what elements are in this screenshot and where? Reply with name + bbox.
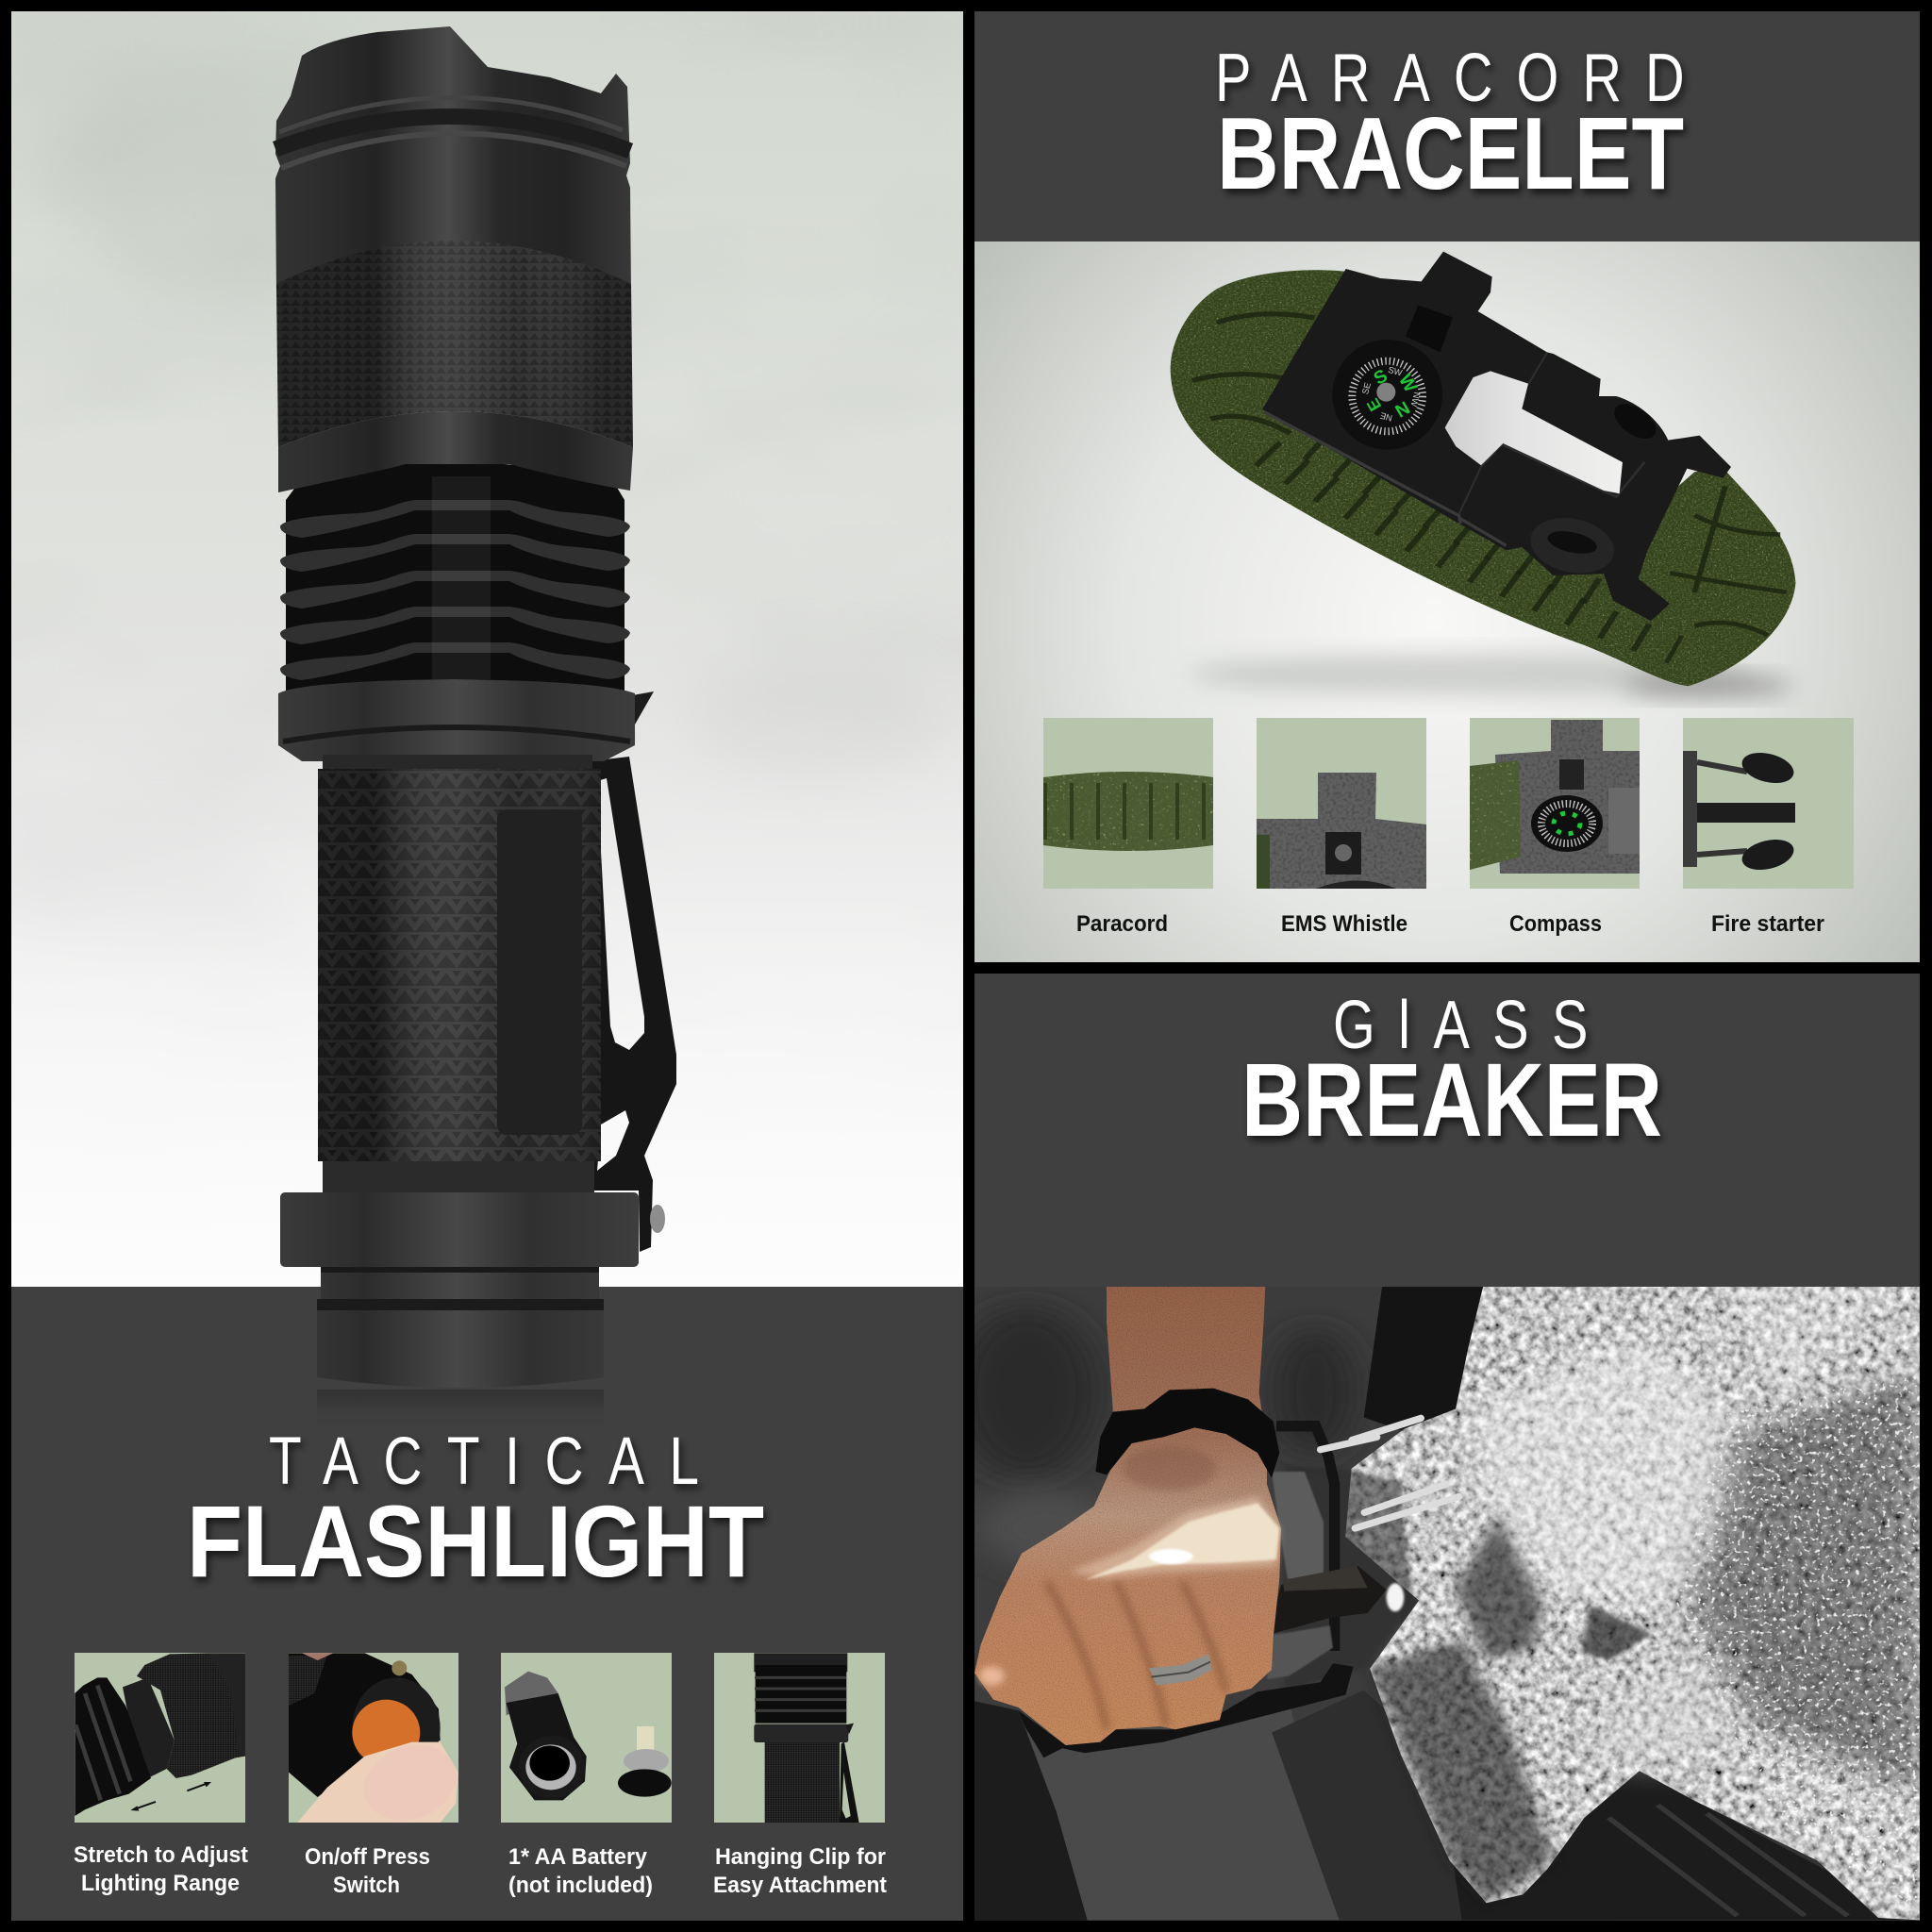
fin sheen strip — [432, 476, 491, 679]
hole in the glass — [1456, 1515, 1541, 1660]
ring groove — [1151, 1662, 1210, 1677]
lower debris shade — [1370, 1639, 1554, 1903]
bright core — [1149, 1549, 1193, 1564]
cooling fins — [280, 500, 630, 680]
caption — [74, 1842, 248, 1896]
caption: 1* AA Battery — [508, 1844, 648, 1870]
knurled zoom ring — [276, 241, 633, 447]
thumbnail: EMS whistle — [1257, 718, 1426, 937]
lower ring — [280, 1192, 639, 1267]
tool lower shards — [1267, 1625, 1333, 1679]
upper collar ring — [278, 679, 635, 761]
label: Compass — [1509, 911, 1602, 937]
ground — [1026, 1707, 1345, 1920]
wrist shadow — [1123, 1446, 1217, 1491]
scene: car window — [954, 1286, 1920, 1920]
whistle hole — [1406, 305, 1453, 352]
caption: Hanging Clip for — [715, 1844, 886, 1870]
head highlight ring upper — [279, 97, 623, 132]
buckle body — [1262, 252, 1731, 621]
caption — [305, 1844, 430, 1898]
top glare — [1725, 1290, 1890, 1400]
tool handle — [1019, 1663, 1354, 1757]
head collar — [278, 411, 633, 492]
panel: bracelet photo — [974, 242, 1920, 962]
striker top — [1283, 1566, 1368, 1591]
weave shadows second row — [1296, 438, 1621, 602]
tail neck — [321, 1267, 599, 1303]
title: TACTICAL FLASHLIGHT: TACTICAL — [269, 1424, 699, 1498]
compass: N — [1391, 396, 1412, 421]
flashlight — [274, 26, 676, 1435]
feature: on/off press switch — [289, 1653, 467, 1898]
left knot shadows — [1192, 314, 1315, 433]
bracelet floor shadow — [1189, 654, 1792, 698]
label: Fire starter — [1711, 911, 1824, 937]
dark window pillar — [1364, 1286, 1483, 1430]
sunlit patch — [1085, 1503, 1279, 1580]
shattered glass — [1284, 1286, 1920, 1920]
collar groove — [283, 727, 630, 741]
finger creases — [1047, 1582, 1226, 1729]
title: PARACORD BRACELET: BRACELET — [1217, 96, 1684, 211]
bright streak — [1584, 1647, 1738, 1775]
tool striker — [1272, 1566, 1387, 1634]
thumb tip — [979, 1667, 1005, 1686]
hand with breaker tool — [974, 1286, 1458, 1922]
speckle droplets — [1676, 1371, 1920, 1916]
label: Paracord — [1076, 911, 1168, 937]
pants — [974, 1701, 1088, 1922]
bracelet — [1171, 252, 1795, 686]
dark lower panel — [11, 1287, 963, 1921]
right knot shadows — [1670, 487, 1787, 636]
buckle lower edge highlight — [1264, 412, 1507, 545]
compass: W — [1394, 371, 1421, 396]
hand — [974, 1286, 1281, 1745]
sunlit glow — [1069, 1497, 1279, 1578]
paracord band — [1171, 270, 1795, 686]
fin core — [286, 462, 625, 693]
panel: paracord bracelet header — [974, 11, 1920, 242]
slot rim — [1503, 445, 1644, 497]
knurled body — [318, 769, 601, 1161]
caption: Stretch to Adjust — [74, 1842, 248, 1868]
tail cap — [317, 1310, 604, 1388]
fire starter slot — [1445, 371, 1623, 493]
weave shadows — [1266, 453, 1676, 650]
panel: glass breaker photo — [954, 1286, 1920, 1922]
tool frame glass — [1272, 1472, 1324, 1588]
black paracord wristband — [1095, 1389, 1279, 1478]
feature: hanging clip — [713, 1653, 887, 1898]
compass: E — [1363, 395, 1385, 414]
title: GlASS BREAKER — [1241, 987, 1662, 1158]
caption: Easy Attachment — [713, 1873, 887, 1898]
compass: SE — [1360, 381, 1373, 395]
blurred background — [954, 1286, 1401, 1755]
clip tip — [623, 691, 654, 726]
feature: AA battery — [501, 1653, 672, 1898]
inner frame shade — [1284, 1464, 1413, 1690]
thumbnail: paracord — [1043, 718, 1213, 937]
lower whistle — [1525, 510, 1620, 580]
neck — [323, 755, 592, 772]
head crown — [275, 26, 631, 292]
caption: Switch — [333, 1873, 400, 1898]
impact glow — [1387, 1583, 1404, 1611]
title: GlASS BREAKER: BREAKER — [1241, 1042, 1662, 1158]
second dark hole — [1581, 1605, 1652, 1660]
head highlight ring lower — [281, 133, 626, 168]
thumbnail: fire starter — [1683, 718, 1854, 937]
lower whistle slot — [1545, 527, 1599, 558]
tail groove — [317, 1299, 604, 1310]
darker speckled zone — [1689, 1374, 1920, 1792]
panel: tactical flashlight — [0, 11, 963, 1921]
label: EMS Whistle — [1281, 911, 1407, 937]
pocket clip — [590, 757, 676, 1252]
neck shadow — [321, 1267, 599, 1273]
compass: SW — [1387, 365, 1404, 377]
title: GlASS BREAKER: GlASS — [1333, 987, 1588, 1062]
compass: S — [1371, 366, 1391, 390]
flat grip panel — [497, 809, 582, 1135]
bright burst — [1462, 1332, 1731, 1605]
compass — [1332, 340, 1442, 450]
flashlight reflection — [317, 1390, 604, 1435]
title: TACTICAL FLASHLIGHT: FLASHLIGHT — [187, 1484, 764, 1598]
car door — [1272, 1690, 1615, 1920]
title: PARACORD BRACELET: PARACORD — [1215, 40, 1685, 115]
white shards — [1321, 1418, 1458, 1528]
door sill — [1438, 1754, 1920, 1920]
panel: glass breaker header — [974, 974, 1920, 1287]
compass: NW — [1408, 391, 1422, 408]
thumbnail: compass — [1470, 718, 1640, 937]
door sill lines — [1608, 1805, 1848, 1916]
caption — [713, 1844, 887, 1898]
clip ball — [650, 1205, 665, 1233]
photo backdrop: misty sky — [0, 11, 963, 1287]
tool frame — [1276, 1426, 1335, 1651]
feature: stretch to adjust — [74, 1653, 248, 1896]
caption: (not included) — [508, 1873, 653, 1898]
title: PARACORD BRACELET — [1215, 40, 1685, 211]
head dark band — [275, 116, 630, 151]
compass: NE — [1379, 410, 1393, 423]
side whistle — [1608, 397, 1662, 445]
caption: Lighting Range — [81, 1871, 240, 1896]
buckle seam — [1459, 353, 1547, 514]
wedding ring — [1149, 1654, 1212, 1686]
caption: On/off Press — [305, 1844, 430, 1870]
plastic buckle and compass — [1262, 252, 1731, 621]
caption — [508, 1844, 653, 1898]
title: TACTICAL FLASHLIGHT — [187, 1424, 764, 1598]
lower neck — [323, 1161, 594, 1194]
